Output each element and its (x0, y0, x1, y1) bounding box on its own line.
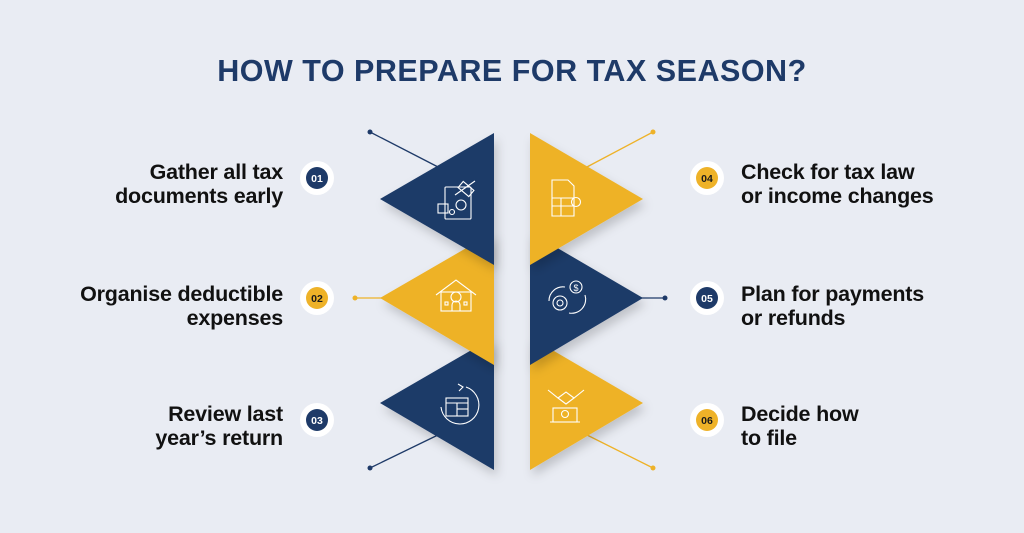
text 02: expenses (187, 306, 283, 330)
text 05: Plan for payments (741, 282, 924, 306)
connector lines (352, 130, 668, 470)
triangle 06 (530, 337, 643, 470)
badges (300, 161, 724, 437)
triangle 03 (380, 337, 494, 470)
text 03: year’s return (155, 426, 283, 450)
badges: 05 (701, 293, 713, 305)
text 02 (80, 282, 283, 330)
text 05 (741, 282, 924, 330)
badges: 02 (311, 293, 323, 305)
text 01: documents early (115, 184, 283, 208)
icon: handshake (548, 390, 584, 422)
text 06 (741, 402, 859, 450)
triangle 05 (530, 232, 643, 365)
icon: gear dollar: $ (573, 283, 579, 293)
text 02: Organise deductible (80, 282, 283, 306)
icon: documents gavel (438, 181, 475, 219)
text 05: or refunds (741, 306, 845, 330)
badges: 04 (701, 173, 713, 185)
text 01 (115, 160, 284, 208)
icon: calendar refresh (441, 384, 479, 424)
text 04: or income changes (741, 184, 934, 208)
text 06: Decide how (741, 402, 858, 426)
icon: sheet check (552, 180, 580, 216)
triangle 04 (530, 133, 643, 265)
title: HOW TO PREPARE FOR TAX SEASON? (217, 54, 807, 88)
icon: gear dollar (549, 281, 586, 313)
text 06: to file (741, 426, 797, 450)
text 03: Review last (168, 402, 283, 426)
triangle 02 (380, 232, 494, 365)
text 04 (741, 160, 934, 208)
badges: 06 (701, 415, 713, 427)
text 03 (155, 402, 283, 450)
text 04: Check for tax law (741, 160, 914, 184)
text 01: Gather all tax (150, 160, 283, 184)
triangle 01 (380, 133, 494, 265)
badges: 03 (311, 415, 323, 427)
icon: house percent (436, 280, 476, 311)
badges: 01 (311, 173, 323, 185)
